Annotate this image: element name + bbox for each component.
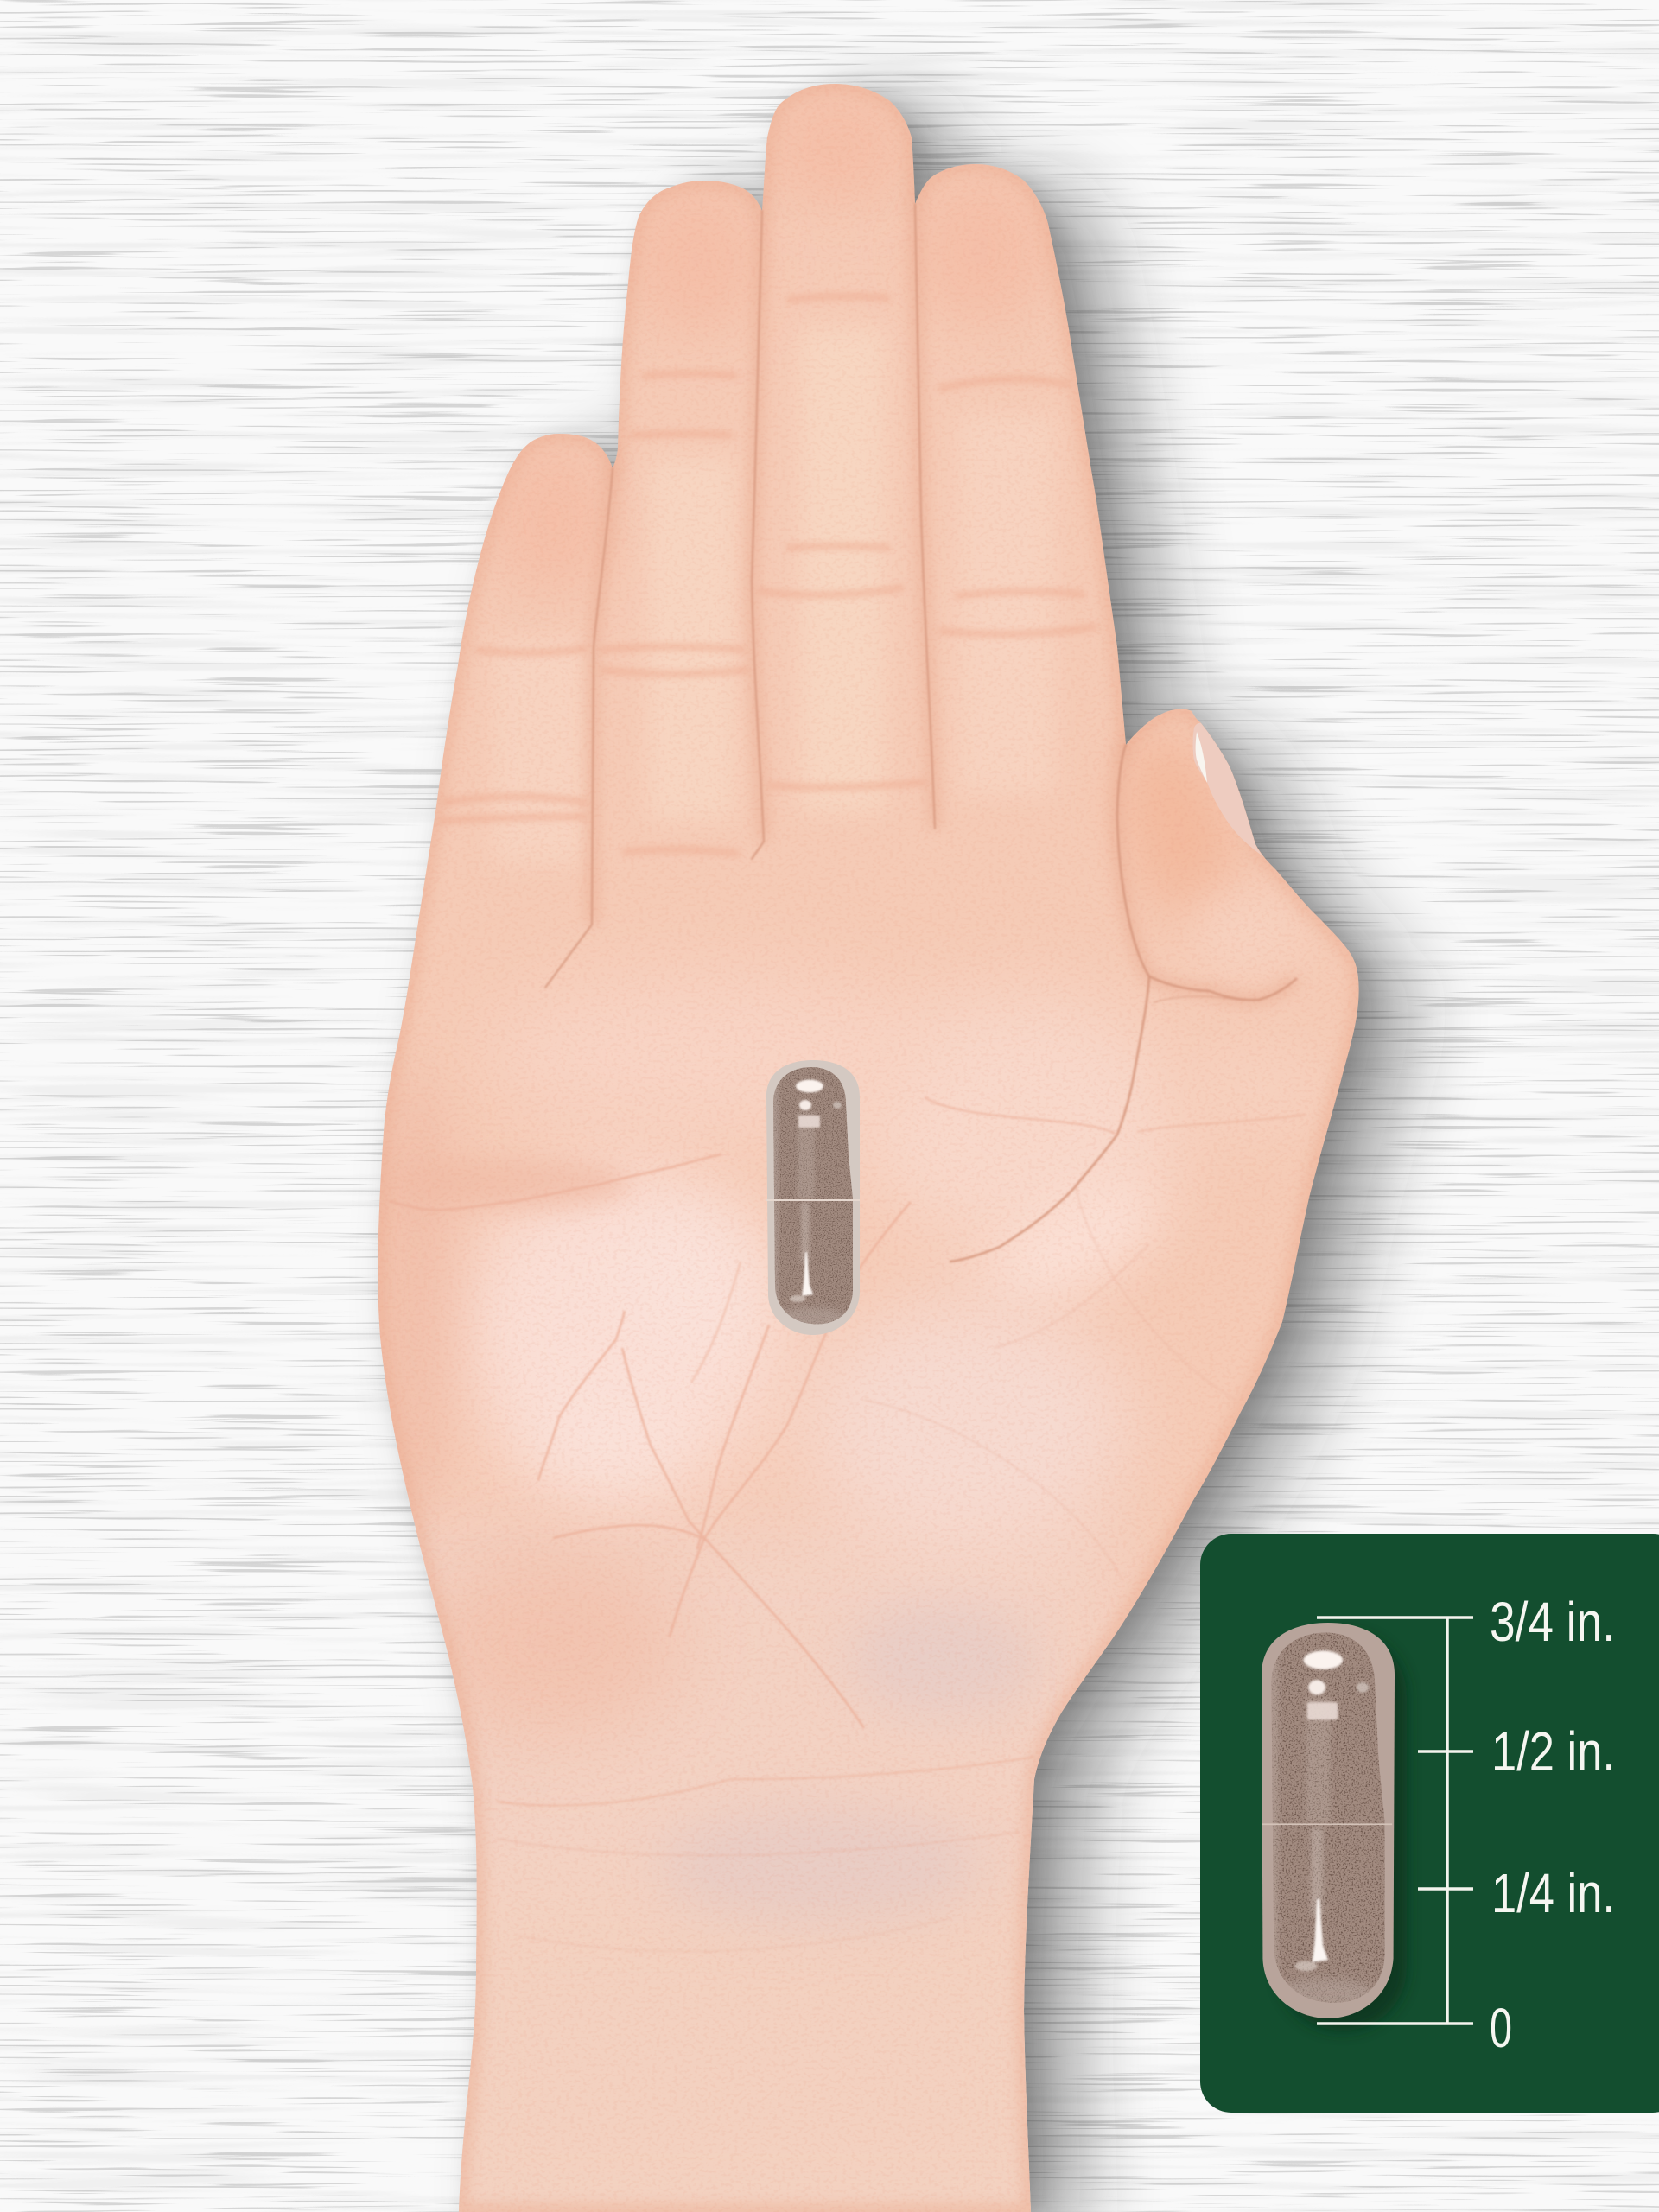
hand xyxy=(346,78,1365,2212)
large capsule shadow xyxy=(1279,1633,1407,2031)
scale label 0: 0 xyxy=(1490,1997,1512,2059)
palm and wrist tone xyxy=(346,976,1184,2212)
hand shadow xyxy=(390,91,1411,2212)
panel background xyxy=(1200,1534,1659,2113)
large capsule xyxy=(1262,1623,1395,2018)
scale label 1/4 in.: 1/4 in. xyxy=(1491,1862,1615,1924)
finger and thumb fold lines xyxy=(545,204,1296,1262)
edge rim shading xyxy=(378,84,1359,2212)
scale label 1/2 in.: 1/2 in. xyxy=(1491,1720,1615,1783)
thumb nail xyxy=(1192,723,1270,862)
finger tones xyxy=(493,86,1331,1141)
finger joint creases xyxy=(439,296,1097,854)
palm lines xyxy=(389,1097,1305,1951)
skin texture xyxy=(476,1025,1156,1707)
capsule on palm xyxy=(766,1060,860,1335)
ruler scale xyxy=(1317,1618,1473,2024)
measurement panel xyxy=(1200,1534,1659,2113)
finger cleft shading xyxy=(592,204,1296,1000)
scale label 3/4 in.: 3/4 in. xyxy=(1490,1591,1615,1653)
